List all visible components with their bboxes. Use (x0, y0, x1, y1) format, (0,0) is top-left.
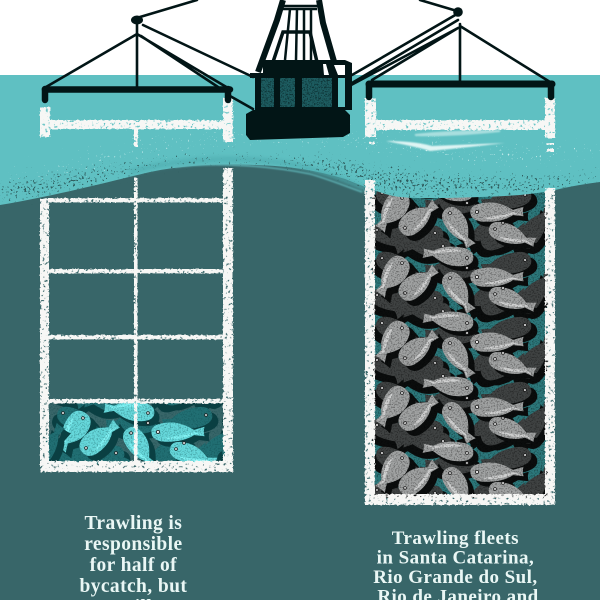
right beam ends (369, 84, 551, 97)
right boom rigging lines (338, 0, 550, 92)
left net: lower frame (40, 168, 233, 472)
right pulley (453, 7, 463, 17)
water stipple (0, 155, 600, 205)
cabin (250, 60, 352, 110)
water sparkle (0, 128, 600, 190)
panel: left net fish catch (46, 402, 226, 464)
cabin rail gaps (323, 64, 345, 75)
right beam (369, 80, 552, 88)
text: left caption: Trawling is (84, 513, 182, 534)
boat (246, 0, 352, 140)
left beam (45, 86, 230, 93)
text: right caption: Rio Grande do Sul, (373, 567, 538, 588)
hull (246, 110, 350, 140)
mast frame (258, 0, 337, 72)
right trawl rig (338, 0, 552, 97)
left trawl rig (45, 0, 253, 109)
panel: right net fish catch (372, 190, 548, 498)
text: left caption: responsible (84, 534, 183, 555)
right net: upper frame (365, 98, 555, 152)
left pulley (131, 16, 143, 24)
darker band along water edge (130, 159, 372, 192)
text: right caption: Trawling fleets (392, 528, 519, 549)
cabin windows (261, 78, 345, 107)
left boom rigging lines (46, 0, 253, 109)
left beam ends (45, 89, 228, 100)
surface water (0, 75, 600, 205)
text: left caption: bycatch, but (79, 576, 187, 597)
text: left caption: for half of (90, 555, 177, 576)
light streaks on water (386, 131, 505, 151)
right net: lower frame (365, 180, 555, 505)
text: right caption: in Santa Catarina, (377, 548, 534, 568)
lighter band below water edge (175, 165, 362, 192)
left net: upper frame (40, 98, 233, 147)
